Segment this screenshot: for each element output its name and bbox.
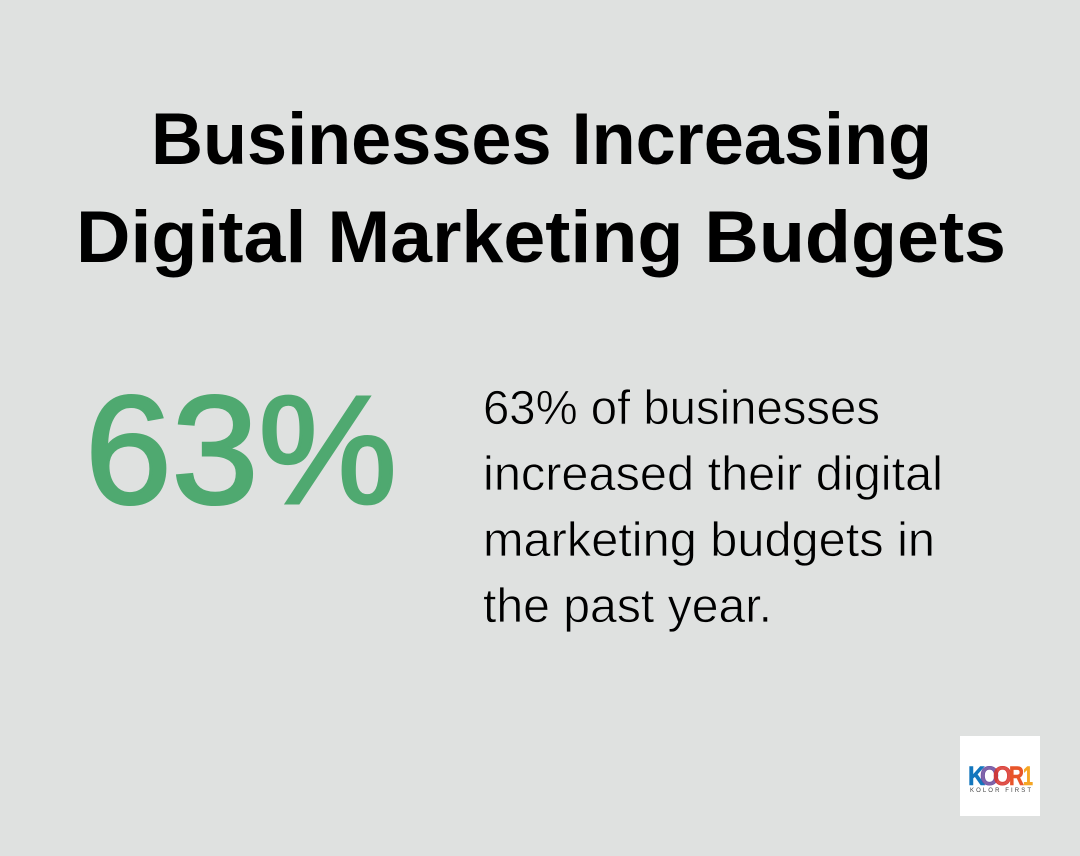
logo: KOOR1 Kolor First: O <box>993 761 1012 791</box>
logo: KOOR1 Kolor First <box>960 736 1040 816</box>
description text: increased their digital <box>483 448 943 501</box>
description text: marketing budgets in <box>483 514 935 567</box>
title: Digital Marketing Budgets <box>76 197 1006 278</box>
logo: KOOR1 Kolor First: KOLOR FIRST <box>970 788 1031 794</box>
description text: the past year. <box>483 580 772 633</box>
description text <box>483 382 943 633</box>
logo: KOOR1 Kolor First: 1 <box>1023 761 1033 791</box>
big stat: 63%: 63% <box>85 364 397 536</box>
description text: 63% of businesses <box>483 382 880 435</box>
logo: KOOR1 Kolor First: O <box>980 761 999 791</box>
logo: KOOR1 Kolor First: R <box>1009 761 1024 791</box>
title <box>76 99 1006 278</box>
logo: KOOR1 Kolor First: K <box>968 761 985 791</box>
title: Businesses Increasing <box>151 99 932 180</box>
